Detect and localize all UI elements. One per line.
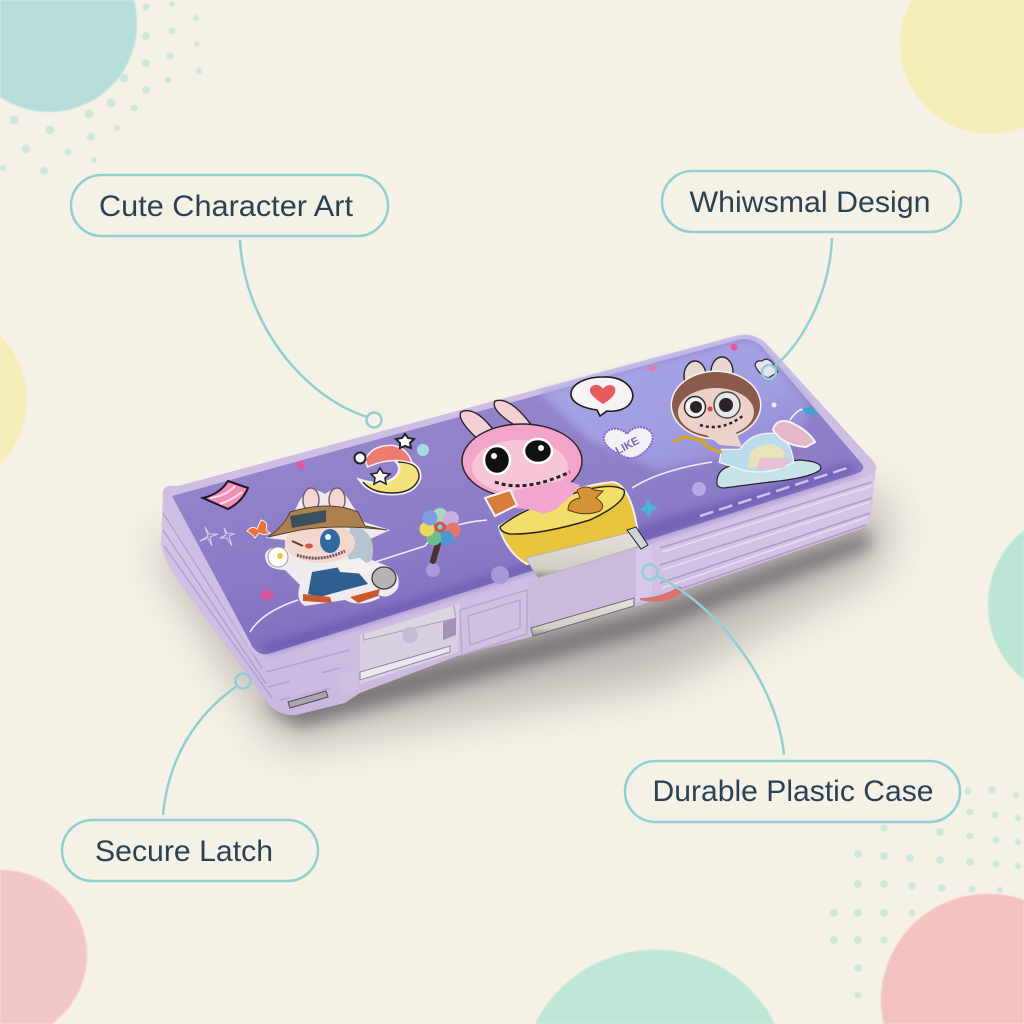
sticker: blue spark	[802, 407, 818, 415]
lemon bowl	[500, 483, 637, 563]
drink	[485, 490, 517, 516]
sticker: small flower	[755, 359, 778, 378]
white wave line	[250, 409, 810, 632]
sticker: pinwheel	[420, 508, 460, 561]
lid right highlight	[540, 340, 810, 470]
body	[705, 430, 742, 447]
sticker: LIKE heart: LIKE	[614, 435, 641, 457]
sticker: hat character	[265, 488, 399, 606]
case ridges: right side	[654, 482, 872, 598]
rabbit body	[510, 480, 580, 514]
lid gloss highlight	[700, 467, 850, 516]
case shadow	[150, 490, 885, 745]
metal clip	[526, 531, 640, 578]
lid top rim	[163, 334, 876, 660]
callout: Secure Latch: Secure Latch	[95, 835, 273, 868]
sticker: LIKE heart	[604, 427, 653, 458]
callout: Whiwsmal Design: Whiwsmal Design	[690, 186, 930, 219]
sticker: sparkles	[200, 527, 234, 546]
rabbit head	[462, 424, 582, 498]
callout: Durable Plastic Case	[625, 564, 960, 822]
rabbit eyes	[484, 446, 510, 474]
callout: Cute Character Art	[71, 175, 388, 428]
sticker: moon with hat	[354, 434, 419, 493]
ears	[684, 361, 706, 391]
sticker: pink star	[258, 587, 276, 603]
bow and arrow	[673, 425, 722, 452]
sticker: speech bubble	[571, 377, 633, 416]
front latch section	[288, 540, 683, 708]
callout: Whiwsmal Design	[662, 171, 961, 379]
sticker: butterfly	[247, 520, 270, 538]
lid lower darker band	[262, 462, 858, 654]
case ridges: left side	[163, 513, 350, 700]
head	[672, 372, 760, 438]
sticker: pink note	[203, 481, 248, 509]
sticker outline	[265, 490, 399, 606]
unicorn tail	[773, 421, 815, 447]
callout: Cute Character Art: Cute Character Art	[99, 190, 354, 223]
case body	[161, 468, 876, 715]
unicorn base	[717, 460, 821, 488]
callout: Durable Plastic Case: Durable Plastic Case	[652, 775, 934, 808]
duck	[568, 487, 603, 514]
callout: Secure Latch	[62, 674, 318, 881]
small dots	[297, 344, 776, 584]
eyes	[684, 396, 706, 418]
lid top face	[172, 339, 863, 654]
sticker: pink sparkle	[645, 364, 659, 373]
pencil case	[161, 334, 876, 715]
sticker: right character on unicorn	[672, 357, 821, 488]
sticker: blue sparkle	[640, 498, 658, 518]
rabbit ears	[460, 411, 495, 443]
sticker: lemon with pink rabbit	[460, 400, 637, 563]
unicorn body	[720, 434, 793, 471]
